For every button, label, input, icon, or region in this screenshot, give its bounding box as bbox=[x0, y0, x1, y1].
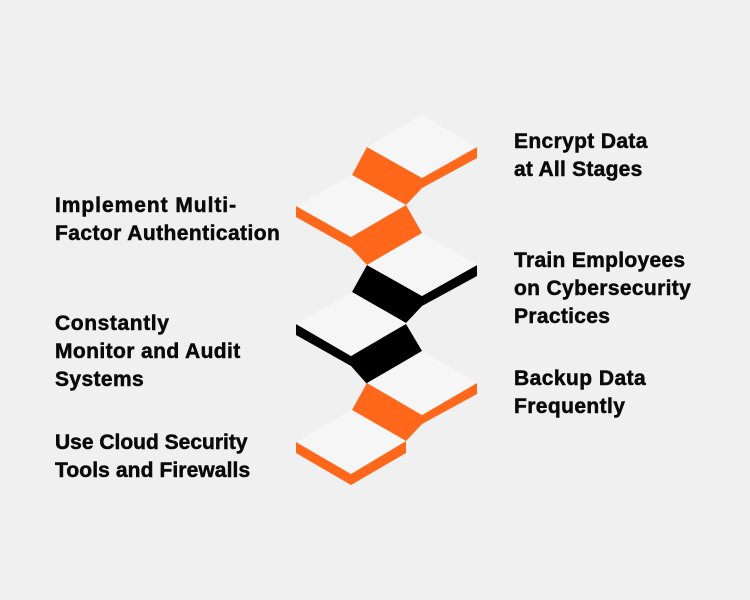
label: train employees: Practices bbox=[514, 305, 610, 328]
label: monitor and audit: Constantly bbox=[55, 312, 170, 335]
label: monitor and audit bbox=[55, 312, 241, 391]
label: monitor and audit: Systems bbox=[55, 368, 144, 391]
label: encrypt data bbox=[514, 130, 648, 181]
label: train employees: Train Employees bbox=[514, 249, 685, 272]
label: cloud security bbox=[55, 431, 250, 482]
label: cloud security: Tools and Firewalls bbox=[55, 459, 250, 482]
label: implement multi-factor authentication: Implement Multi- bbox=[55, 194, 237, 217]
label: backup data: Frequently bbox=[514, 395, 625, 418]
label: train employees bbox=[514, 249, 691, 328]
label: cloud security: Use Cloud Security bbox=[55, 431, 248, 454]
step 2: multi-factor authentication bbox=[296, 175, 422, 265]
label: backup data bbox=[514, 367, 646, 418]
label: implement multi-factor authentication bbox=[55, 194, 280, 245]
label: monitor and audit: Monitor and Audit bbox=[55, 340, 241, 363]
step 3: train employees bbox=[352, 233, 477, 323]
label: implement multi-factor authentication: Factor Authentication bbox=[55, 222, 280, 245]
label: train employees: on Cybersecurity bbox=[514, 277, 691, 300]
step 5: backup data bbox=[352, 351, 477, 441]
label: backup data: Backup Data bbox=[514, 367, 646, 390]
label: encrypt data: at All Stages bbox=[514, 158, 643, 181]
step 1: encrypt data bbox=[352, 115, 477, 205]
label: encrypt data: Encrypt Data bbox=[514, 130, 648, 153]
step 4: monitor and audit bbox=[296, 292, 422, 384]
step 6: cloud security bbox=[296, 410, 406, 485]
